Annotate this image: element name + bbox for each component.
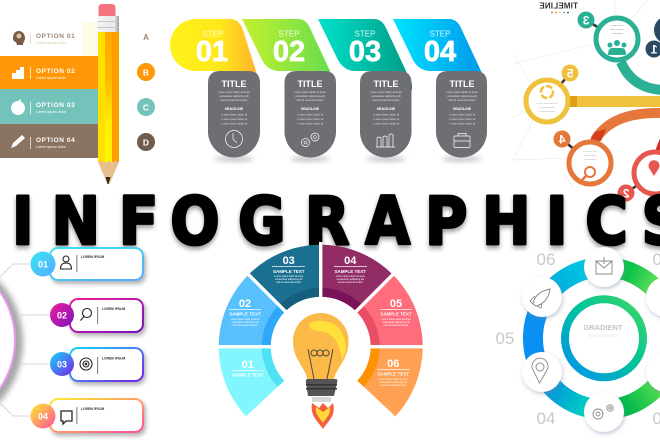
step 2 card: • Lorem ipsum dolor sit	[297, 122, 323, 126]
segment 06: sed do eiusmod tempor	[381, 384, 406, 387]
step 1 ribbon	[170, 19, 260, 90]
option 04 row: Lorem ipsum dolor	[36, 145, 67, 149]
node bottom: gears	[584, 392, 624, 432]
icon: gears	[302, 133, 319, 146]
step 2 ribbon	[242, 19, 336, 90]
step 1 card: HEADLINE	[225, 107, 244, 111]
segment 05: Lorem ipsum dolor sit amet	[382, 318, 411, 321]
letter D badge	[137, 133, 155, 151]
segment 05: 05	[390, 298, 402, 310]
node 2	[618, 152, 660, 202]
icon: bar chart	[376, 134, 395, 147]
node 4: consectetur	[584, 158, 596, 161]
ring numbers: 04	[537, 409, 555, 428]
card 04: 04	[38, 412, 48, 422]
panel: numbered cards	[0, 248, 143, 432]
segment 02	[219, 275, 285, 347]
step 1 card: • Lorem ipsum dolor sit	[221, 122, 247, 126]
step 1 ribbon: 01	[196, 36, 228, 68]
node 3: 3	[582, 14, 590, 28]
card 02: 02	[57, 310, 67, 320]
card 03: LOREM IPSUM	[102, 356, 126, 360]
letter A: A	[143, 33, 149, 42]
step 3 card: sed do eiusmod tempor	[372, 98, 400, 102]
segment 06: consectetur adipiscing elit	[380, 381, 407, 384]
letter C badge	[137, 98, 155, 116]
step 3 card: HEADLINE	[377, 107, 396, 111]
step 2 card	[284, 71, 336, 158]
segment 02: sed do eiusmod tempor	[233, 324, 258, 327]
segment 03: 03	[283, 255, 295, 267]
node 3: Lorem ipsum	[611, 24, 623, 27]
option 03 row	[0, 89, 98, 124]
option 03 row: OPTION 03	[36, 102, 75, 109]
step 1 card	[208, 71, 260, 158]
icon: pencil	[98, 4, 119, 184]
step 4 card: • Lorem ipsum dolor sit	[449, 122, 475, 126]
option 04 row: OPTION 04	[36, 137, 75, 144]
step 4 card: consectetur adipiscing elit	[447, 94, 477, 98]
segment 01: SAMPLE TEXT	[232, 372, 264, 378]
segment 06: 06	[387, 358, 399, 370]
node 3	[578, 12, 638, 60]
step 4 card	[436, 71, 487, 158]
panel: mirrored timeline	[513, 0, 660, 202]
node 1: 1	[650, 42, 658, 56]
segment 05: sed do eiusmod tempor	[384, 324, 409, 327]
card 01: LOREM IPSUM	[81, 255, 105, 259]
card 04: LOREM IPSUM	[81, 407, 105, 411]
option 01 row: OPTION 01	[36, 33, 75, 40]
step 2 card: consectetur adipiscing elit	[295, 94, 325, 98]
step 4 card: sed do eiusmod tempor	[448, 98, 476, 102]
step 1 card: TITLE	[222, 79, 246, 89]
segment 05	[356, 275, 423, 347]
center label	[583, 323, 623, 338]
panel: light bulb fan	[216, 242, 425, 429]
segment 06: Lorem ipsum dolor sit amet	[379, 378, 408, 381]
panel: gradient ring	[496, 247, 660, 432]
segment 03: consectetur adipiscing elit	[275, 278, 303, 281]
option 01 row	[13, 22, 99, 56]
step 2 card: • Lorem ipsum dolor sit	[297, 112, 323, 116]
segment 04	[321, 245, 393, 311]
step 4 ribbon: 04	[424, 36, 456, 68]
node 3: dolor sit amet	[610, 28, 624, 31]
node 5: 5	[566, 66, 574, 80]
node 2: 2	[622, 186, 630, 200]
node 4	[554, 129, 611, 184]
ring numbers: 05	[496, 329, 514, 348]
icon: flame	[312, 403, 334, 429]
card 01	[30, 248, 143, 280]
step 4 ribbon: STEP	[430, 30, 450, 38]
node upper left: rocket	[522, 277, 562, 317]
step 1 ribbon: STEP	[203, 30, 223, 38]
step 3 card: • Lorem ipsum dolor sit	[373, 122, 399, 126]
step 3 card: consectetur adipiscing elit	[371, 94, 401, 98]
segment 01: 01	[242, 359, 254, 371]
step 2 ribbon: STEP	[279, 30, 299, 38]
segment 01	[219, 347, 284, 416]
segment 03: Lorem ipsum dolor sit amet	[274, 275, 303, 278]
node 5: consectetur elit	[540, 106, 555, 109]
card 03: 03	[57, 360, 67, 370]
node 4: dolor sit amet	[583, 154, 597, 157]
step 3 ribbon: STEP	[355, 30, 375, 38]
option 02 row	[0, 56, 98, 89]
step 2 ribbon: 02	[273, 36, 305, 68]
letter C badge: C	[143, 102, 149, 112]
step 4 card: • Lorem ipsum dolor sit	[449, 117, 475, 121]
step 2 card: Lorem ipsum dolor sit amet	[294, 90, 326, 94]
option 02 row: Lorem ipsum dolor	[36, 76, 67, 80]
icon: briefcase	[454, 134, 470, 148]
segment 05: SAMPLE TEXT	[380, 312, 412, 316]
ring segments	[533, 267, 660, 409]
step 1 card: • Lorem ipsum dolor sit	[221, 117, 247, 121]
letter B badge	[137, 63, 155, 81]
step 3 card: • Lorem ipsum dolor sit	[373, 112, 399, 116]
timeline heading: TIMELINE	[539, 2, 578, 10]
network lines	[513, 0, 648, 190]
step 2 card: • Lorem ipsum dolor sit	[297, 117, 323, 121]
step 3 card	[360, 71, 412, 158]
node 4: Lorem ipsum	[584, 150, 596, 153]
step 4 card: • Lorem ipsum dolor sit	[449, 112, 475, 116]
icon: light bulb	[293, 313, 348, 429]
icon: speech bubble	[61, 411, 72, 424]
segment 04: SAMPLE TEXT	[335, 269, 366, 274]
step 3 ribbon	[318, 19, 412, 90]
center label: GRADIENT	[583, 323, 623, 332]
segment 06	[357, 347, 423, 416]
step 1 card: • Lorem ipsum dolor sit	[221, 112, 247, 116]
segment 03: SAMPLE TEXT	[273, 269, 305, 274]
node lower right	[646, 352, 660, 392]
step 1 card: Lorem ipsum dolor sit amet	[218, 90, 250, 94]
step 2 card: HEADLINE	[301, 107, 320, 111]
step 1 card: sed do eiusmod tempor	[220, 98, 248, 102]
icon: target	[80, 358, 92, 370]
step 4 card: Lorem ipsum dolor sit amet	[446, 90, 478, 94]
icon: clock	[226, 130, 242, 148]
card 01: 01	[38, 260, 48, 270]
segment 02: Lorem ipsum dolor sit amet	[231, 318, 260, 321]
ring numbers: 06	[537, 250, 555, 269]
panel: pencil options	[0, 4, 155, 184]
option 03 row: Lorem ipsum dolor	[36, 110, 67, 114]
segment gaps	[216, 242, 425, 347]
node top: mail	[584, 247, 624, 287]
step 3 card: TITLE	[374, 79, 398, 89]
node 5: sed do eiusmod	[539, 111, 556, 113]
segment 02: 02	[239, 298, 251, 310]
step 2 card: sed do eiusmod tempor	[296, 98, 324, 102]
option 02 row: OPTION 02	[36, 68, 75, 75]
card 02: LOREM IPSUM	[102, 307, 126, 311]
node upper right	[646, 277, 660, 317]
option 01 row: Lorem ipsum dolor	[36, 41, 67, 45]
step 2 card: TITLE	[298, 79, 322, 89]
card 04	[30, 399, 143, 432]
ring numbers	[496, 250, 660, 428]
segment 04: consectetur adipiscing elit	[337, 278, 364, 281]
step 3 card: • Lorem ipsum dolor sit	[373, 117, 399, 121]
pill shadows	[214, 156, 482, 162]
segment 02: SAMPLE TEXT	[229, 312, 261, 316]
icon: magnifier	[80, 308, 92, 320]
node 1	[646, 16, 660, 58]
segment 06: SAMPLE TEXT	[378, 372, 409, 376]
option 04 row	[0, 124, 98, 158]
segment 03	[249, 245, 321, 311]
node lower left: map pin	[522, 352, 562, 392]
panel: four steps	[170, 19, 487, 162]
segment 04: Lorem ipsum dolor sit amet	[336, 275, 365, 278]
node 5	[526, 64, 578, 122]
yellow track	[568, 96, 660, 107]
step 4 ribbon	[393, 19, 487, 90]
red track	[657, 140, 660, 153]
step 1 card: consectetur adipiscing elit	[219, 94, 249, 98]
segment 05: consectetur adipiscing elit	[382, 321, 410, 324]
letter D badge: D	[143, 138, 149, 148]
node 3: consectetur	[611, 32, 623, 35]
teal track	[621, 62, 660, 90]
node 4: 4	[558, 132, 566, 146]
letter B badge: B	[143, 68, 149, 78]
node 5: Lorem ipsum dolor sit	[537, 102, 558, 105]
segment 04: 04	[344, 255, 357, 267]
large ring	[0, 253, 23, 431]
step 4 card: HEADLINE	[453, 107, 472, 111]
segment 04: sed do eiusmod tempor	[338, 281, 363, 284]
center label: INFOGRAPHICS	[588, 333, 619, 338]
step 3 ribbon: 03	[349, 36, 381, 68]
card 03	[50, 348, 143, 381]
card 02	[50, 299, 143, 332]
icon: person	[60, 256, 72, 269]
segment 02: consectetur adipiscing elit	[231, 321, 259, 324]
connector lines	[0, 264, 52, 416]
step 4 card: TITLE	[450, 79, 474, 89]
inner ring	[565, 299, 643, 377]
step 3 card: Lorem ipsum dolor sit amet	[370, 90, 402, 94]
orange track	[595, 113, 660, 140]
segment 03: sed do eiusmod tempor	[276, 281, 301, 284]
